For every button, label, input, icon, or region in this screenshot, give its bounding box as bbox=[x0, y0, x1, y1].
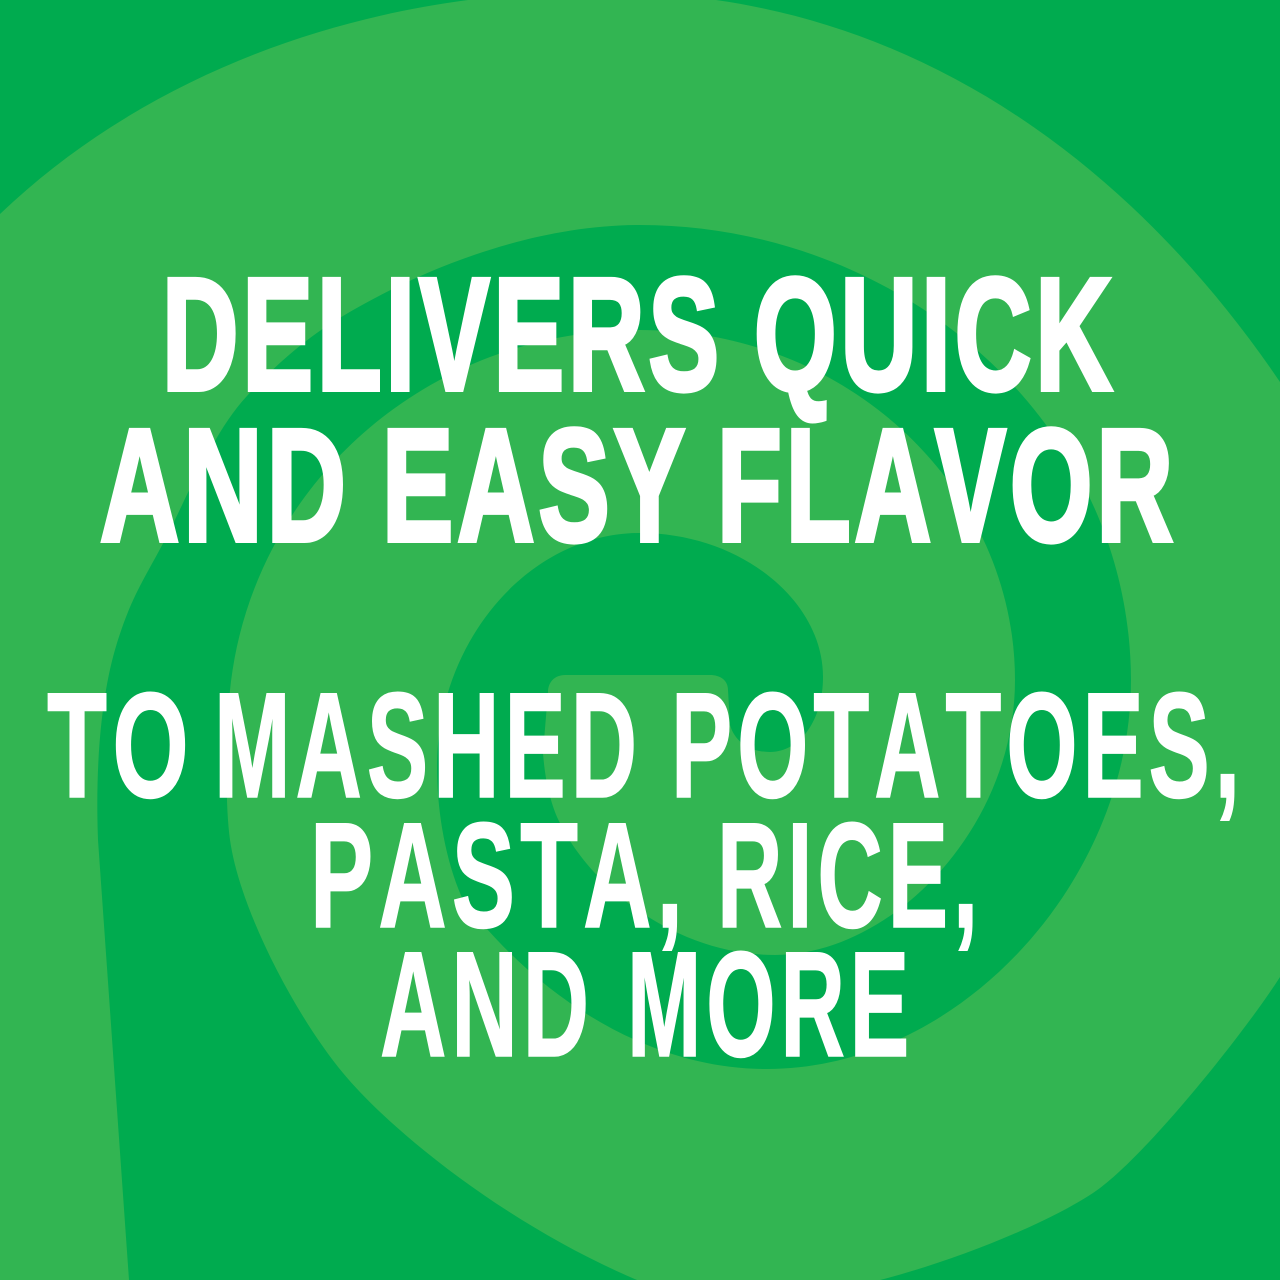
heading line 2: EASY bbox=[382, 396, 689, 574]
heading line 1: DELIVERS bbox=[162, 244, 723, 424]
subheading line 1: TO bbox=[47, 661, 194, 829]
subheading line 2: RICE, bbox=[717, 791, 983, 959]
heading: delivers quick and easy flavor bbox=[100, 244, 1177, 574]
heading line 2 bbox=[100, 396, 1177, 574]
subheading line 3: AND bbox=[380, 920, 594, 1088]
subheading line 3 bbox=[380, 920, 914, 1088]
subheading line 1: MASHED bbox=[214, 661, 642, 829]
subheading line 2: PASTA, bbox=[310, 791, 688, 959]
background: dark green spiral band bbox=[97, 225, 1131, 1280]
subheading: to mashed potatoes, pasta, rice, and more bbox=[47, 661, 1245, 1088]
heading line 2: AND bbox=[100, 396, 350, 574]
subheading line 1 bbox=[47, 661, 1245, 829]
subheading line 3: MORE bbox=[627, 920, 914, 1088]
